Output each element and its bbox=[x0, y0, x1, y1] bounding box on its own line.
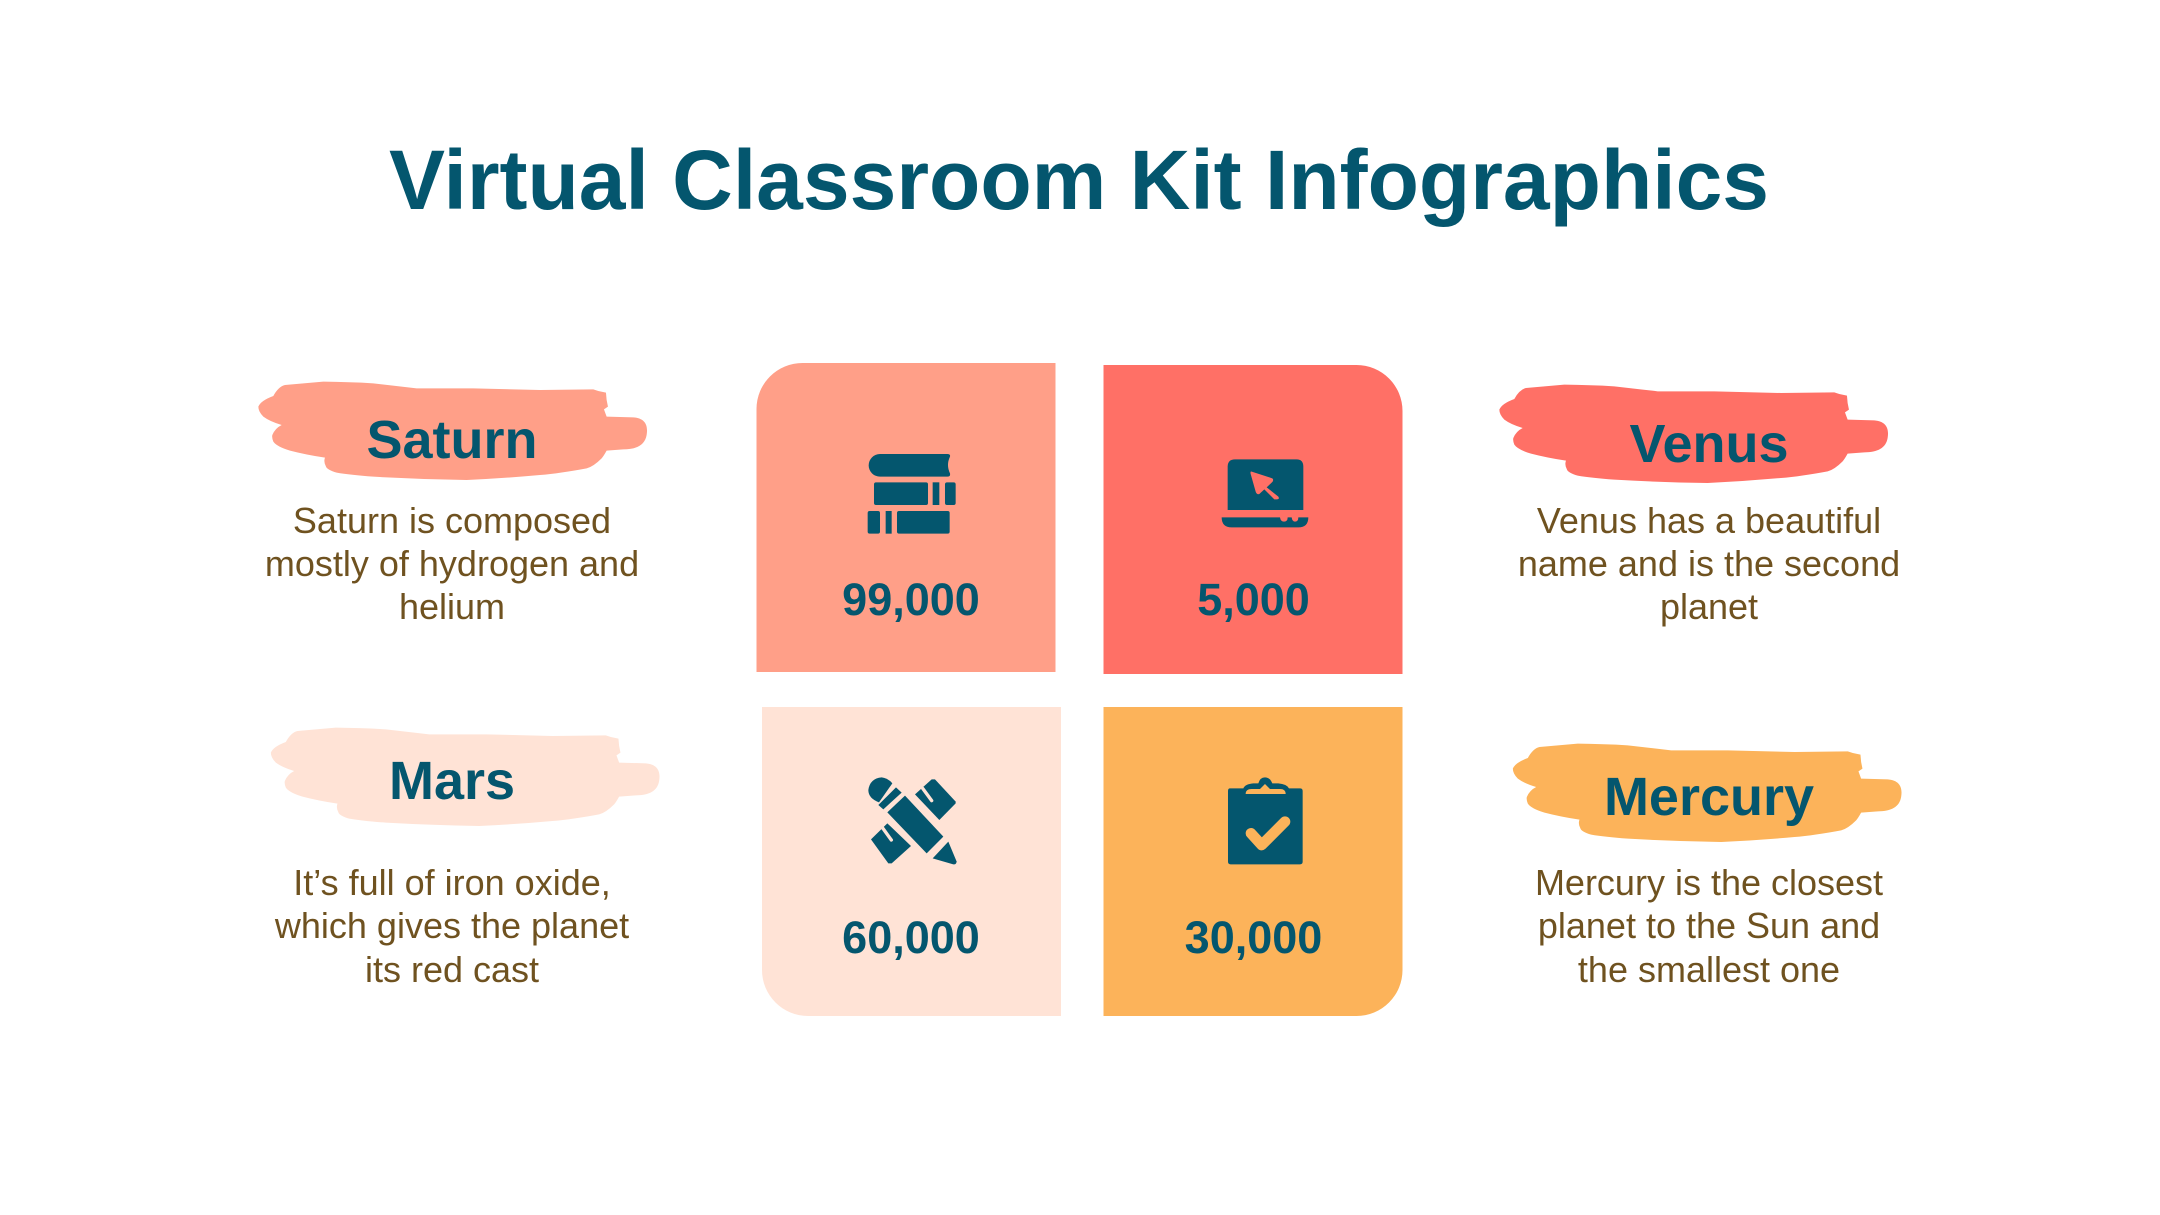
card background bbox=[762, 707, 1061, 1016]
description: Saturn: mostly of hydrogen and bbox=[265, 543, 639, 584]
panel: 99,000 card bbox=[756, 363, 1056, 672]
brush: Mars bbox=[271, 728, 660, 826]
brush: Mercury bbox=[1513, 744, 1902, 842]
description: Mars: It’s full of iron oxide, bbox=[293, 862, 611, 903]
description: Mercury: planet to the Sun and bbox=[1538, 905, 1880, 946]
icon: laptop with cursor bbox=[1222, 459, 1308, 527]
value: 60,000: 60,000 bbox=[842, 912, 980, 963]
value: 30,000: 30,000 bbox=[1185, 912, 1322, 963]
icon: clipboard with check bbox=[1228, 777, 1303, 864]
icon: books bbox=[868, 454, 956, 534]
description: Saturn: Saturn is composed bbox=[293, 500, 611, 541]
brush: Saturn bbox=[258, 382, 647, 480]
card background bbox=[1104, 365, 1402, 674]
heading: Venus: Venus bbox=[1629, 414, 1789, 474]
heading: Saturn: Saturn bbox=[366, 410, 538, 470]
heading: Mars: Mars bbox=[389, 751, 515, 811]
value: 99,000: 99,000 bbox=[842, 574, 980, 625]
card background bbox=[1104, 707, 1402, 1016]
description: Venus: Venus has a beautiful bbox=[1537, 500, 1881, 541]
panel: Mercury text block bbox=[1513, 744, 1902, 990]
description: Saturn: helium bbox=[399, 586, 505, 627]
heading: Mercury: Mercury bbox=[1604, 767, 1814, 827]
description: Venus: planet bbox=[1660, 586, 1758, 627]
panel: 30,000 card bbox=[1104, 707, 1402, 1016]
title: Virtual Classroom Kit Infographics bbox=[389, 133, 1769, 227]
description: Venus: name and is the second bbox=[1518, 543, 1900, 584]
description: Mars: which gives the planet bbox=[274, 905, 629, 946]
value: 5,000: 5,000 bbox=[1197, 574, 1310, 625]
panel: Saturn text block bbox=[258, 382, 647, 627]
panel: Mars text block bbox=[271, 728, 660, 990]
panel: Venus text block bbox=[1499, 385, 1900, 627]
description: Mercury: Mercury is the closest bbox=[1535, 862, 1883, 903]
description: Mars: its red cast bbox=[365, 949, 539, 990]
brush: Venus bbox=[1499, 385, 1888, 483]
description: Mercury: the smallest one bbox=[1578, 949, 1840, 990]
card background bbox=[756, 363, 1056, 672]
panel: 5,000 card bbox=[1104, 365, 1402, 674]
panel: 60,000 card bbox=[762, 707, 1061, 1016]
icon: pencil and ruler bbox=[868, 777, 957, 864]
